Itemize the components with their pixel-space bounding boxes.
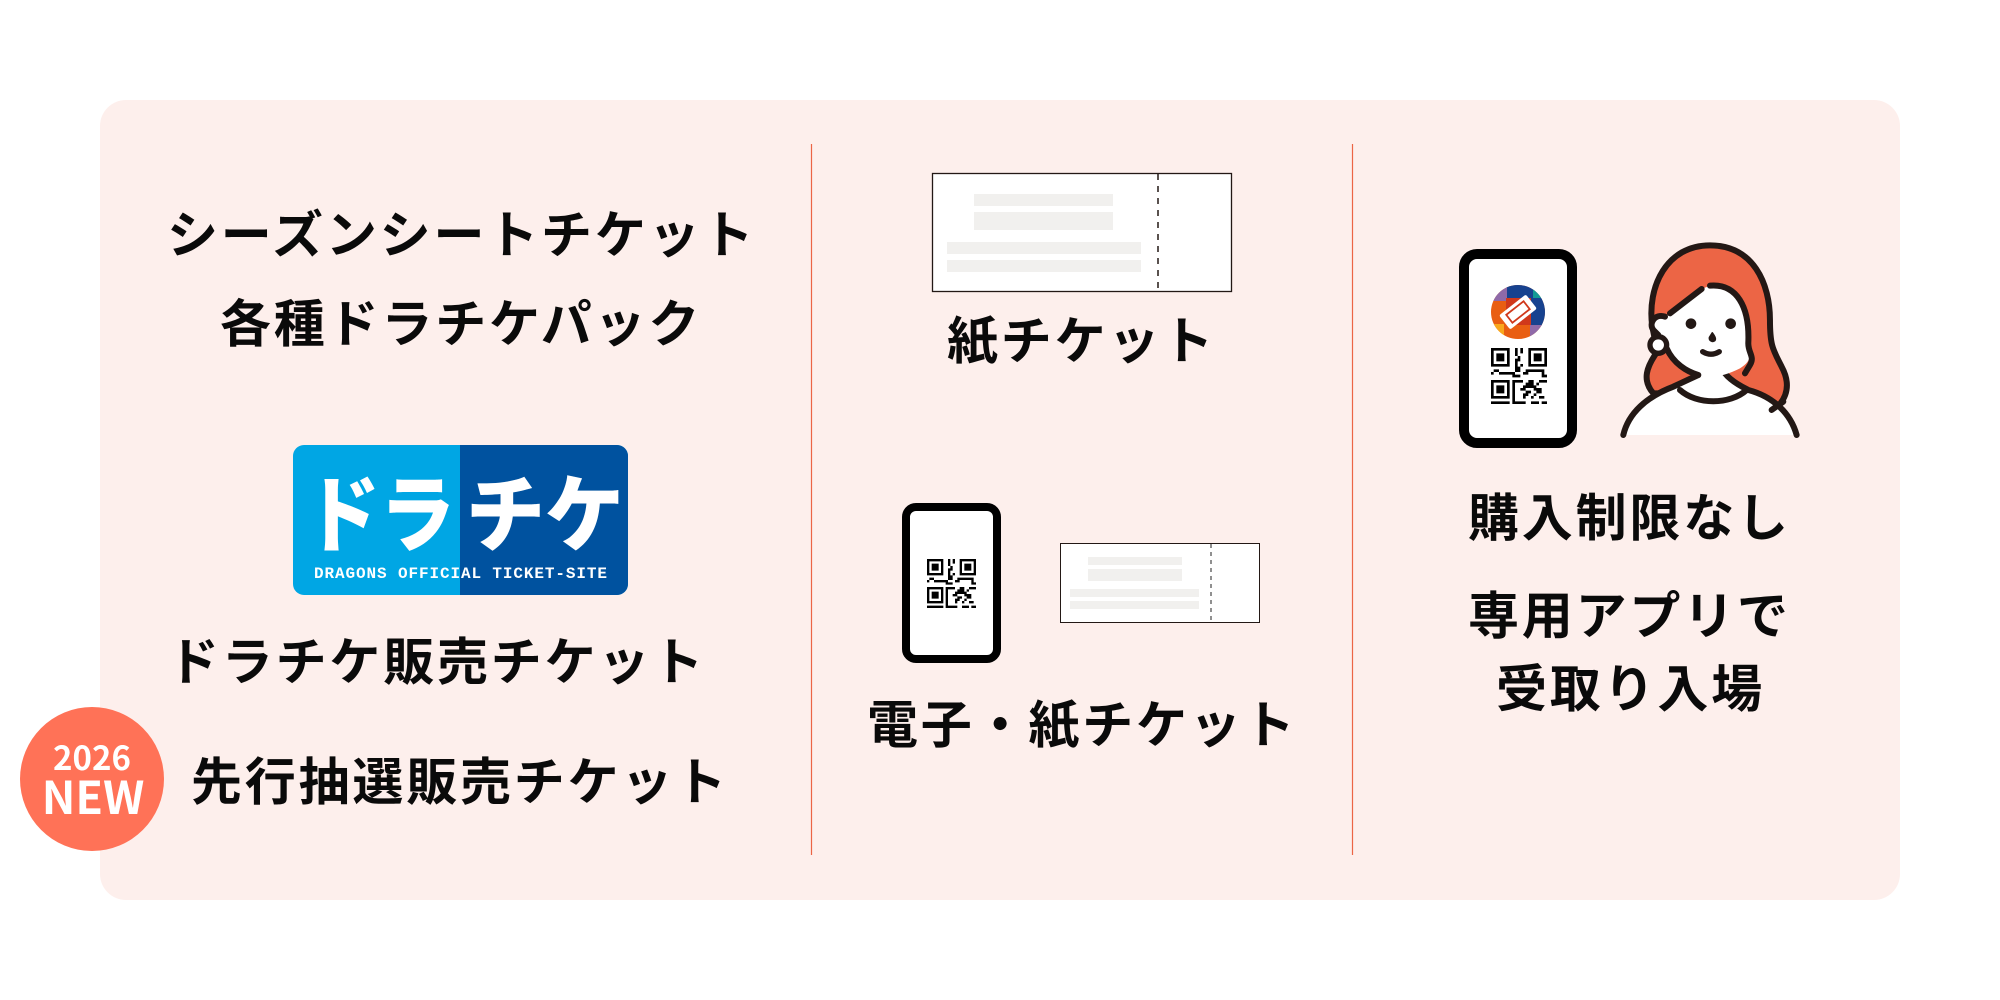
body xyxy=(1623,375,1797,435)
eyes and nose xyxy=(1686,318,1696,329)
badge: 2026 new: NEW xyxy=(42,762,144,827)
icon: small paper ticket xyxy=(1060,544,1260,622)
badge: 2026 new xyxy=(20,707,164,851)
earring xyxy=(1650,337,1667,353)
text: no purchase limit: 購入制限なし xyxy=(1468,490,1791,547)
face xyxy=(1653,285,1750,377)
text: advance lottery ticket: 先行抽選販売チケット xyxy=(191,754,729,811)
logo: dorachike: ドラ xyxy=(305,469,455,563)
logo: dorachike: チケ xyxy=(466,469,624,563)
badge: 2026 new: 2026 xyxy=(53,732,131,780)
text: dorachike sale ticket: ドラチケ販売チケット xyxy=(168,634,706,691)
icon: smartphone with QR xyxy=(906,507,997,659)
text: dedicated app line 1: 専用アプリで xyxy=(1468,588,1791,645)
panel: background xyxy=(100,100,1900,900)
icon: woman illustration xyxy=(1623,245,1797,435)
text: electronic and paper ticket: 電子・紙チケット xyxy=(867,697,1297,754)
text: dedicated app line 2: 受取り入場 xyxy=(1496,661,1765,718)
logo: dorachike: DRAGONS OFFICIAL TICKET-SITE xyxy=(314,565,607,583)
logo: dorachike xyxy=(293,445,628,595)
icon: paper ticket xyxy=(932,174,1232,292)
icon: smartphone with app xyxy=(1464,254,1572,443)
icon: QR code xyxy=(1491,349,1547,403)
icon: app logo xyxy=(1490,284,1547,340)
text: paper ticket: 紙チケット xyxy=(947,313,1216,370)
hair xyxy=(1647,245,1787,411)
heading: dorachike pack: 各種ドラチケパック xyxy=(220,296,702,353)
heading: season seat ticket: シーズンシートチケット xyxy=(167,207,756,264)
